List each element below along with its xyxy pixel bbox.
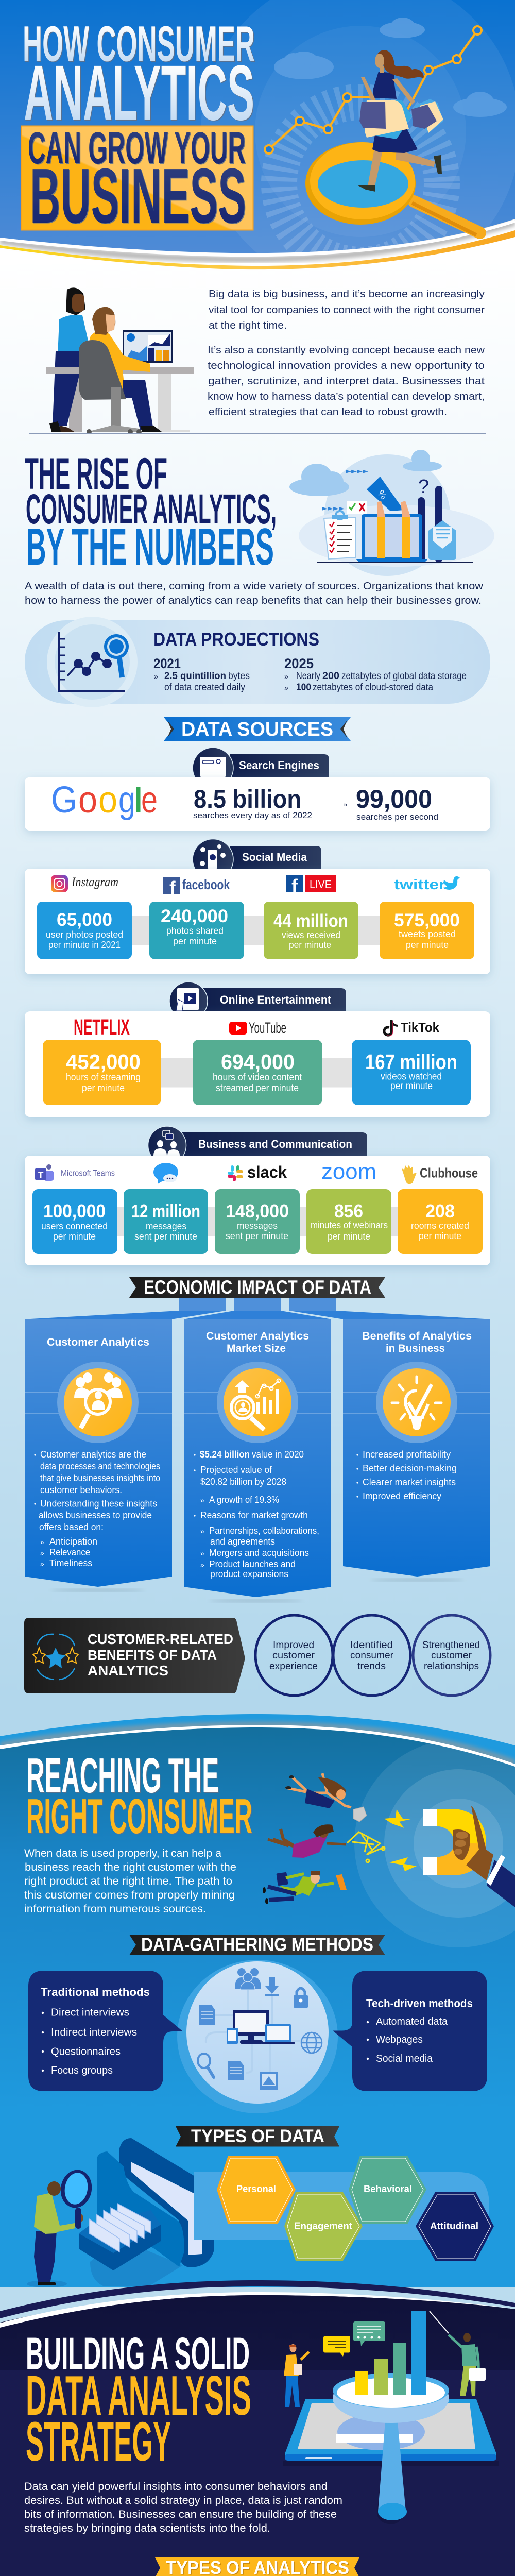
paragraph: right product at the right time. The path to xyxy=(24,1875,232,1887)
intro paragraph: wealth of data: how to harness the power of analytics can reap benefits that can help their businesses grow. xyxy=(25,595,482,606)
stat: clubhouse: per minute xyxy=(419,1231,461,1241)
2021 column: 2.5 quintillion xyxy=(164,671,226,682)
stat: zoom xyxy=(306,1189,391,1254)
benefit ring: improved customer experience xyxy=(255,1615,333,1696)
header: search engines xyxy=(193,748,329,788)
2021 column: of data created daily xyxy=(164,682,245,693)
envelope xyxy=(428,520,456,560)
stat: tiktok: per minute xyxy=(390,1081,433,1092)
2025 column: zettabytes of cloud-stored data xyxy=(313,682,433,693)
intro paragraph: wealth of data: A wealth of data is out there, coming from a wide variety of sources. Organizations that know xyxy=(25,580,483,592)
logo: google: e xyxy=(141,779,158,821)
panel: benefits of analytics in business: Benefits of Analytics xyxy=(362,1330,472,1342)
paragraph xyxy=(24,2481,342,2534)
header: online entertainment xyxy=(169,982,346,1020)
logo: microsoft teams xyxy=(35,1164,115,1181)
connectors under economic impact ribbon xyxy=(25,1298,490,1319)
market size bullets: value in 2020 xyxy=(252,1449,304,1460)
intro text: gather, scrutinize, and interpret data. Businesses that xyxy=(208,376,485,387)
heading: the rise of consumer analytics: BY THE NUMBERS xyxy=(26,518,274,576)
customer analytics bullets: Relevance xyxy=(49,1547,90,1557)
stat: facebook live: per minute xyxy=(289,940,331,950)
logo: facebook xyxy=(163,877,230,898)
stat: tiktok: videos watched xyxy=(381,1072,442,1082)
icon: document xyxy=(199,2005,215,2025)
benefit ring: identified consumer trends: trends xyxy=(357,1661,386,1672)
logo: google xyxy=(51,779,158,821)
stat: slack: messages xyxy=(237,1221,278,1231)
ribbon heading: types of data: TYPES OF DATA xyxy=(191,2126,324,2146)
stat: netflix: 452,000 xyxy=(66,1050,141,1074)
coupon: % xyxy=(375,488,389,502)
benefit ring: improved customer experience: customer xyxy=(272,1650,315,1661)
callout: tech-driven methods: Social media xyxy=(376,2053,433,2064)
title: CAN GROW YOUR xyxy=(28,123,246,173)
panel: customer analytics xyxy=(25,1319,172,1592)
stat: facebook live xyxy=(264,902,358,959)
stat: zoom: minutes of webinars xyxy=(311,1220,388,1230)
panel: online entertainment card xyxy=(25,1011,490,1117)
flying woman in navy dress xyxy=(285,1773,367,1822)
benefit ring: strengthened customer relationships: customer xyxy=(431,1650,472,1661)
callout: tech-driven methods: Automated data xyxy=(376,2016,448,2027)
logo: netflix: NETFLIX xyxy=(74,1015,130,1040)
intro text: technological innovation provides a new opportunity to xyxy=(208,360,485,371)
market size bullets: product expansions xyxy=(210,1569,288,1579)
stat: facebook: per minute xyxy=(173,936,217,946)
market size bullets: » xyxy=(200,1527,204,1535)
panel: search engines card: » xyxy=(344,801,347,808)
customer analytics bullets: Anticipation xyxy=(49,1536,97,1547)
benefit ring: strengthened customer relationships: Strengthened xyxy=(422,1640,480,1651)
illustration: laptop and checklist: ▸▸▸▸ xyxy=(346,467,368,475)
panel: data projections xyxy=(25,617,490,707)
customer analytics bullets: customer behaviors. xyxy=(40,1485,122,1495)
types of data backing band xyxy=(194,2172,489,2240)
market size bullets xyxy=(194,1449,319,1579)
panel: customer-related benefits of data analytics: CUSTOMER-RELATED xyxy=(88,1631,233,1647)
logo: twitter: twitter xyxy=(394,876,445,892)
logo: messenger xyxy=(153,1163,178,1184)
hero section xyxy=(0,0,515,291)
stat: youtube: hours of video content xyxy=(213,1072,302,1083)
heading xyxy=(26,1748,252,1844)
stat: twitter xyxy=(380,902,474,959)
logo: google: G xyxy=(51,779,77,821)
2025 column: Nearly xyxy=(296,671,320,682)
customer analytics bullets: that give businesses insights into xyxy=(40,1473,160,1483)
stat: instagram: user photos posted xyxy=(46,929,123,940)
speech bubbles xyxy=(323,2321,385,2357)
icon: stars and arrows xyxy=(33,1634,78,1680)
benefit ring: improved customer experience: experience xyxy=(269,1661,318,1672)
stat: messenger: 12 million xyxy=(131,1200,200,1222)
paragraph: strategies by bringing data scientists into the fold. xyxy=(24,2522,270,2534)
hexagon: attitudinal: Attitudinal xyxy=(430,2221,478,2232)
icon: people talking xyxy=(153,1130,180,1156)
title xyxy=(22,15,255,239)
icon: magnifier xyxy=(198,2054,214,2077)
stat: facebook: 240,000 xyxy=(161,906,228,926)
icon: document two xyxy=(228,2061,244,2080)
paragraph: this customer comes from properly mining xyxy=(24,1889,235,1901)
benefit ring: identified consumer trends: consumer xyxy=(350,1650,394,1661)
stat: teams: 100,000 xyxy=(43,1200,106,1222)
intro text: It’s also a constantly evolving concept because each new xyxy=(208,345,485,356)
icon: lock xyxy=(294,1988,308,2008)
icon: market growth xyxy=(217,1362,298,1443)
header: search engines: Search Engines xyxy=(239,759,319,772)
customer analytics bullets: Customer analytics are the xyxy=(40,1449,146,1460)
stat: twitter: 575,000 xyxy=(394,910,460,930)
benefits bullets: Clearer market insights xyxy=(363,1477,456,1487)
customer analytics bullets: data processes and technologies xyxy=(40,1461,160,1471)
logo: tiktok: TikTok xyxy=(401,1020,439,1035)
customer analytics bullets: Timeliness xyxy=(49,1558,92,1568)
logo: slack xyxy=(228,1163,287,1181)
magnifying glass xyxy=(305,142,480,235)
callout: traditional methods: Traditional methods xyxy=(41,1986,150,1998)
benefits bullets xyxy=(356,1449,457,1501)
heading: DATA ANALYSIS xyxy=(26,2364,251,2427)
header: social media xyxy=(193,839,321,880)
header: business and communication: Business and Communication xyxy=(198,1138,352,1150)
intro paragraph: wealth of data xyxy=(25,580,483,606)
stat: instagram: 65,000 xyxy=(57,910,112,930)
stat: clubhouse: 208 xyxy=(425,1200,455,1222)
title gold box xyxy=(22,126,253,230)
logo: tiktok xyxy=(384,1020,439,1036)
stat: clubhouse xyxy=(398,1189,483,1254)
benefits bullets: Better decision-making xyxy=(363,1463,457,1473)
stat: instagram xyxy=(37,902,132,959)
2025 column: » xyxy=(284,672,288,681)
panel: customer-related benefits of data analytics xyxy=(24,1618,245,1693)
2021 column: » xyxy=(154,672,158,681)
magnet glow circles xyxy=(354,1739,515,1947)
paragraph xyxy=(24,1848,236,1915)
flying woman in purple dress xyxy=(268,1824,385,1862)
coupon xyxy=(367,477,404,511)
stat: facebook xyxy=(149,902,244,959)
callout: tech-driven methods: Webpages xyxy=(376,2034,423,2045)
heading xyxy=(26,2328,251,2472)
logo: slack: slack xyxy=(247,1163,287,1181)
market size bullets: » xyxy=(200,1549,204,1557)
benefits bullets: Increased profitability xyxy=(363,1449,451,1460)
logo: clubhouse xyxy=(402,1165,478,1184)
market size bullets: Mergers and acquisitions xyxy=(209,1548,309,1558)
logo: instagram xyxy=(51,875,118,892)
logo: microsoft teams: Microsoft Teams xyxy=(61,1168,115,1178)
2025 column: zettabytes of global data storage xyxy=(341,671,467,682)
hexagon: engagement xyxy=(284,2192,363,2261)
header: social media: Social Media xyxy=(242,851,307,863)
ribbon heading: data sources: DATA SOURCES xyxy=(181,719,333,740)
lightning bolts xyxy=(384,1809,417,1871)
customer analytics bullets: allows businesses to provide xyxy=(39,1510,152,1520)
intro text: know how to harness data’s potential can develop smart, xyxy=(208,391,485,402)
stat: netflix: hours of streaming xyxy=(66,1072,141,1083)
clouds xyxy=(274,18,507,117)
heading: BUILDING A SOLID xyxy=(26,2328,250,2379)
2025 column: 2025 xyxy=(284,656,314,671)
logo: microsoft teams: T xyxy=(38,1170,44,1180)
stat: twitter: tweets posted xyxy=(399,929,456,939)
market size bullets: » xyxy=(200,1561,204,1569)
market size bullets: Projected value of xyxy=(200,1465,272,1475)
logo: google: g xyxy=(118,779,135,821)
illustration: laptop and checklist: ? xyxy=(418,476,429,498)
section: reaching the right consumer: RIGHT CONSUMER xyxy=(26,1789,252,1844)
illustration: tablet, magnifier and bars xyxy=(283,2311,499,2524)
2021 column: 2021 xyxy=(153,656,181,671)
customer analytics bullets: offers based on: xyxy=(39,1522,104,1532)
panel: customer-related benefits of data analytics: ANALYTICS xyxy=(88,1663,168,1679)
shopper woman xyxy=(358,50,443,192)
presenter left xyxy=(284,2344,309,2407)
market size bullets: Product launches and xyxy=(209,1559,296,1569)
benefit ring: identified consumer trends: Identified xyxy=(350,1640,393,1651)
2025 column: » xyxy=(284,684,288,692)
market size bullets: Partnerships, collaborations, xyxy=(209,1526,319,1536)
magnet with hand xyxy=(384,1806,515,1907)
callout: traditional methods: Indirect interviews xyxy=(51,2027,137,2038)
stat: daily searches: 8.5 billion xyxy=(194,785,301,814)
stat: messenger xyxy=(124,1189,208,1254)
intro text: Big data is big business, and it’s become an increasingly xyxy=(209,289,485,300)
icon: light bulb with check xyxy=(376,1362,457,1443)
customer analytics bullets: » xyxy=(40,1560,44,1568)
icon: globe xyxy=(301,2032,322,2053)
icon: people xyxy=(235,1968,261,1990)
icon: image xyxy=(260,2072,278,2090)
stat: searches per second: searches per second xyxy=(356,812,438,822)
checklist xyxy=(324,511,355,559)
presenter right xyxy=(449,2333,486,2396)
panel: customer analytics market size: Customer Analytics xyxy=(206,1330,309,1342)
2021 column xyxy=(153,656,250,693)
hero panel background xyxy=(0,0,515,253)
stat: slack: sent per minute xyxy=(226,1231,288,1241)
icon: download arrow xyxy=(265,1977,279,1996)
stat: twitter: per minute xyxy=(406,940,449,950)
stat: netflix xyxy=(43,1040,161,1105)
logo: youtube: YouTube xyxy=(249,1020,286,1037)
illustration: laptop and checklist: ▸▸▸▸ xyxy=(322,504,345,512)
heading: the rise of consumer analytics: THE RISE OF xyxy=(25,449,167,499)
stat: facebook live: views received xyxy=(282,930,340,940)
paragraph: When data is used properly, it can help a xyxy=(24,1848,221,1859)
illustration: laptop and checklist xyxy=(289,450,494,576)
stat: searches per second: 99,000 xyxy=(356,785,432,814)
logo: google: o xyxy=(98,779,117,821)
customer analytics bullets: » xyxy=(40,1549,44,1557)
panel: customer analytics: Customer Analytics xyxy=(47,1336,149,1348)
callout: traditional methods: Direct interviews xyxy=(51,2007,129,2019)
panel: social media card xyxy=(25,869,490,974)
intro text xyxy=(208,289,485,418)
stat: clubhouse: rooms created xyxy=(411,1221,469,1231)
intro text: at the right time. xyxy=(209,320,287,331)
hexagon: attitudinal xyxy=(416,2192,494,2261)
stat: slack xyxy=(215,1189,300,1254)
customer analytics bullets: » xyxy=(40,1538,44,1546)
logo: facebook live xyxy=(286,875,336,896)
stat: teams: users connected xyxy=(41,1221,108,1231)
market size bullets: $5.24 billion xyxy=(200,1449,250,1460)
icon: customers under magnifier xyxy=(57,1362,139,1443)
central data network illustration xyxy=(177,1960,338,2113)
logo: google: o xyxy=(78,779,97,821)
stat: tiktok: 167 million xyxy=(365,1050,457,1074)
2025 column xyxy=(284,656,467,693)
shopping cart xyxy=(347,1832,385,1862)
callout: tech-driven methods: Tech-driven methods xyxy=(366,1997,473,2010)
market size bullets: A growth of 19.3% xyxy=(209,1495,279,1505)
logo: youtube xyxy=(229,1020,286,1037)
hexagon: engagement: Engagement xyxy=(294,2221,353,2232)
stat: zoom: 856 xyxy=(334,1200,363,1222)
market size bullets: and agreements xyxy=(210,1536,275,1547)
hexagon: personal xyxy=(217,2156,296,2224)
panel: search engines card xyxy=(25,777,490,831)
stat: zoom: per minute xyxy=(328,1231,370,1242)
header: business and communication xyxy=(148,1126,367,1164)
panel: business and communication card xyxy=(25,1156,490,1265)
stat: netflix: per minute xyxy=(82,1083,125,1094)
icon: phone with social bubbles xyxy=(200,844,226,869)
illustration: analysts at desk xyxy=(46,287,194,434)
panel: customer analytics market size: Market Size xyxy=(227,1343,286,1354)
section: building a solid data analysis strategy xyxy=(0,2280,515,2576)
logo: zoom: zoom xyxy=(321,1159,376,1183)
logo: instagram: Instagram xyxy=(71,875,118,889)
title: BUSINESS xyxy=(30,152,246,239)
icon: chart and magnifier xyxy=(47,617,138,707)
paragraph: desires. But without a solid strategy in place, data is just random xyxy=(24,2495,342,2506)
stat: teams: per minute xyxy=(53,1231,96,1242)
panel: benefits of analytics in business: in Business xyxy=(386,1343,445,1354)
2025 column: 200 xyxy=(322,671,339,682)
folder xyxy=(97,2138,214,2267)
stat: teams xyxy=(32,1189,117,1254)
benefit ring: identified consumer trends xyxy=(333,1615,410,1696)
panel: customer analytics market size xyxy=(184,1319,331,1602)
logo: facebook: f xyxy=(169,878,176,898)
file drawer xyxy=(79,2204,161,2270)
page background xyxy=(0,0,515,1958)
stat: messenger: sent per minute xyxy=(134,1231,197,1242)
title: ANALYTICS xyxy=(24,49,254,137)
hexagon: personal: Personal xyxy=(236,2184,276,2195)
2021 column: bytes xyxy=(228,671,250,682)
panel: benefits of analytics in business xyxy=(343,1319,490,1582)
callout: tech-driven methods xyxy=(333,1971,487,2091)
stat: youtube: streamed per minute xyxy=(216,1083,299,1094)
stat: slack: 148,000 xyxy=(226,1200,289,1222)
icon: video tablet xyxy=(176,988,199,1011)
person with magnifier xyxy=(34,2167,95,2285)
stat: instagram: per minute in 2021 xyxy=(48,940,121,950)
title: HOW CONSUMER xyxy=(23,15,255,72)
intro text: vital tool for companies to connect with the right consumer xyxy=(209,304,485,316)
market size bullets: $20.82 billion by 2028 xyxy=(200,1477,286,1487)
callout: traditional methods xyxy=(28,1971,183,2091)
heading: the rise of consumer analytics xyxy=(25,449,277,576)
benefits bullets: Improved efficiency xyxy=(363,1491,441,1501)
logo: facebook live: LIVE xyxy=(310,878,332,891)
illustration: person inspecting files xyxy=(27,2138,214,2287)
paragraph: bits of information. Businesses can ensure the building of these xyxy=(24,2509,337,2520)
paragraph: business reach the right customer with the xyxy=(25,1861,236,1873)
background circles and rays xyxy=(201,0,515,253)
hexagon: behavioral: Behavioral xyxy=(364,2184,412,2195)
gold swoosh xyxy=(0,230,515,269)
stat: facebook live: 44 million xyxy=(273,911,348,931)
logo: twitter xyxy=(394,876,460,892)
market size bullets: » xyxy=(200,1496,204,1504)
callout: traditional methods: Questionnaires xyxy=(51,2046,121,2058)
benefit ring: strengthened customer relationships: relationships xyxy=(424,1661,479,1672)
growth line chart xyxy=(265,26,482,154)
heading: STRATEGY xyxy=(26,2410,171,2472)
stat: daily searches: searches every day as of 2022 xyxy=(193,810,312,820)
header: online entertainment: Online Entertainment xyxy=(220,993,332,1006)
benefit ring: strengthened customer relationships xyxy=(413,1615,490,1696)
icon: devices xyxy=(227,2010,295,2044)
heading: REACHING THE xyxy=(26,1748,219,1803)
2025 column: 100 xyxy=(296,682,311,693)
section: reaching the right consumer xyxy=(0,1714,515,2287)
intro text: efficient strategies that can lead to robust growth. xyxy=(209,406,447,418)
icon: search monitor xyxy=(200,757,226,777)
logo: facebook live: f xyxy=(291,875,298,896)
callout: traditional methods: Focus groups xyxy=(51,2065,113,2076)
ribbon heading: economic impact of data: ECONOMIC IMPACT OF DATA xyxy=(144,1277,371,1298)
customer analytics bullets xyxy=(34,1449,160,1568)
ribbon heading: data-gathering methods: DATA-GATHERING METHODS xyxy=(141,1934,373,1955)
panel: customer-related benefits of data analytics: BENEFITS OF DATA xyxy=(88,1647,217,1663)
panel: data projections: DATA PROJECTIONS xyxy=(153,629,319,650)
stat: youtube: 694,000 xyxy=(221,1050,295,1074)
paragraph: information from numerous sources. xyxy=(24,1903,206,1915)
hexagon: behavioral xyxy=(349,2156,426,2224)
stat: facebook: photos shared xyxy=(166,925,224,936)
benefit ring: improved customer experience: Improved xyxy=(273,1640,314,1651)
paragraph: Data can yield powerful insights into consumer behaviors and xyxy=(24,2481,328,2493)
market size bullets: Reasons for market growth xyxy=(200,1510,308,1520)
stat: tiktok xyxy=(352,1040,471,1105)
stat: youtube xyxy=(193,1040,322,1105)
flying man in green shirt xyxy=(263,1870,347,1904)
customer analytics bullets: Understanding these insights xyxy=(40,1498,157,1509)
stat: messenger: messages xyxy=(146,1221,186,1231)
logo: clubhouse: Clubhouse xyxy=(420,1165,478,1181)
logo: facebook: facebook xyxy=(182,877,230,892)
